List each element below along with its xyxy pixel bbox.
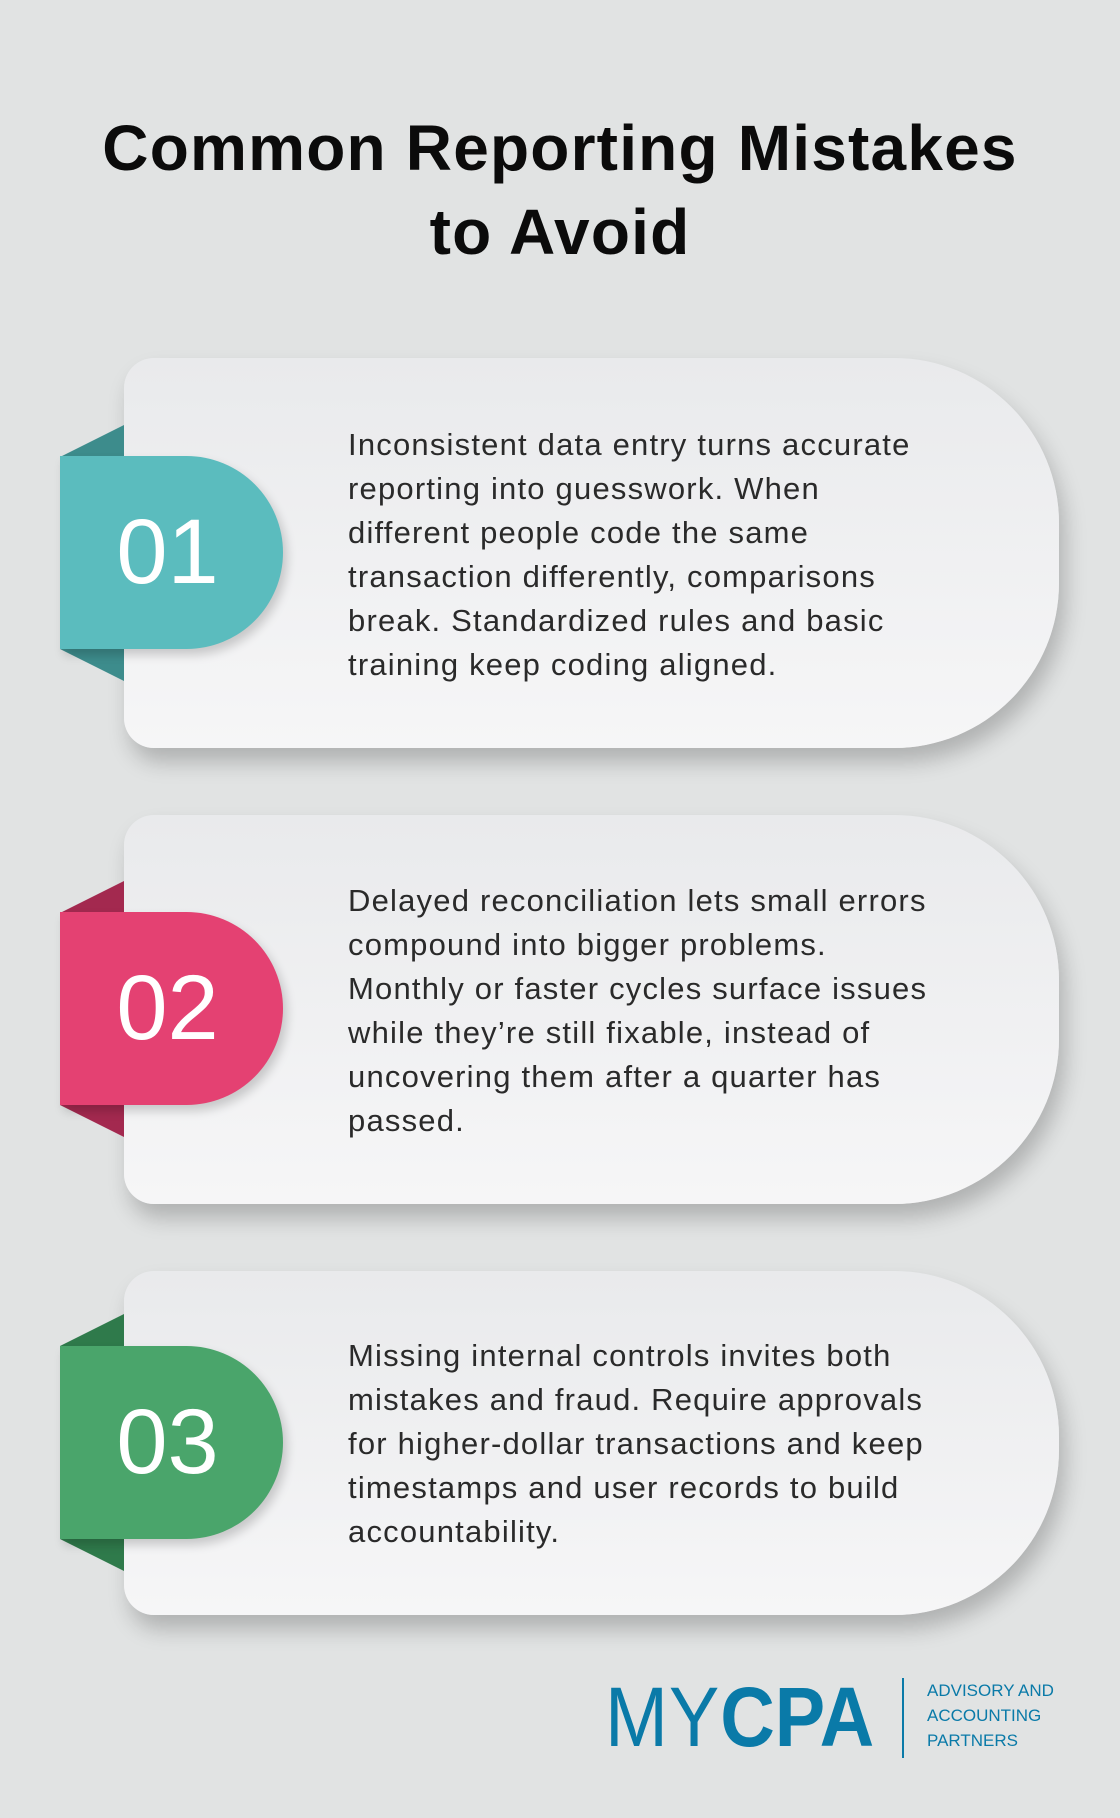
text 01 — [348, 427, 911, 682]
text 03: mistakes and fraud. Require approvals — [348, 1382, 923, 1417]
logo — [605, 1670, 1054, 1764]
logo tagline — [927, 1681, 1054, 1750]
text 02: passed. — [348, 1103, 465, 1138]
badge 01: 01 — [116, 501, 219, 603]
badge 02 — [60, 912, 283, 1105]
badge 01 — [60, 456, 283, 649]
text 02 — [348, 883, 927, 1138]
text 01: different people code the same — [348, 515, 809, 550]
text 03: Missing internal controls invites both — [348, 1338, 892, 1373]
text 02: uncovering them after a quarter has — [348, 1059, 881, 1094]
text 02: Delayed reconciliation lets small errors — [348, 883, 927, 918]
logo divider — [902, 1678, 904, 1758]
fold bottom 02 — [60, 1105, 124, 1137]
card 03 — [124, 1271, 1059, 1615]
text 01: training keep coding aligned. — [348, 647, 777, 682]
badge 03: 03 — [116, 1391, 219, 1493]
text 01: break. Standardized rules and basic — [348, 603, 885, 638]
fold bottom 03 — [60, 1539, 124, 1571]
text 03: for higher-dollar transactions and keep — [348, 1426, 924, 1461]
text 03: accountability. — [348, 1514, 560, 1549]
badge 02: 02 — [116, 957, 219, 1059]
title: to Avoid — [430, 196, 690, 268]
logo tagline: ACCOUNTING — [927, 1706, 1041, 1725]
text 02: Monthly or faster cycles surface issues — [348, 971, 927, 1006]
logo wordmark: MYCPA — [605, 1670, 874, 1764]
panel: mistake 02 — [60, 815, 1075, 1228]
fold top 03 — [60, 1314, 124, 1346]
fold top 02 — [62, 881, 124, 912]
text 02: while they’re still fixable, instead of — [348, 1015, 870, 1050]
title — [102, 112, 1018, 268]
fold bottom 01 — [60, 649, 124, 681]
panel: mistake 01 — [60, 358, 1075, 772]
fold top 01 — [62, 425, 124, 456]
card 01 — [124, 358, 1059, 748]
logo tagline: ADVISORY AND — [927, 1681, 1054, 1700]
text 01: Inconsistent data entry turns accurate — [348, 427, 911, 462]
text 03 — [348, 1338, 924, 1549]
badge 03 — [60, 1346, 283, 1539]
text 01: reporting into guesswork. When — [348, 471, 820, 506]
logo tagline: PARTNERS — [927, 1731, 1018, 1750]
text 02: compound into bigger problems. — [348, 927, 827, 962]
panel: mistake 03 — [60, 1271, 1075, 1639]
title: Common Reporting Mistakes — [102, 112, 1018, 184]
text 01: transaction differently, comparisons — [348, 559, 876, 594]
card 02 — [124, 815, 1059, 1204]
text 03: timestamps and user records to build — [348, 1470, 900, 1505]
